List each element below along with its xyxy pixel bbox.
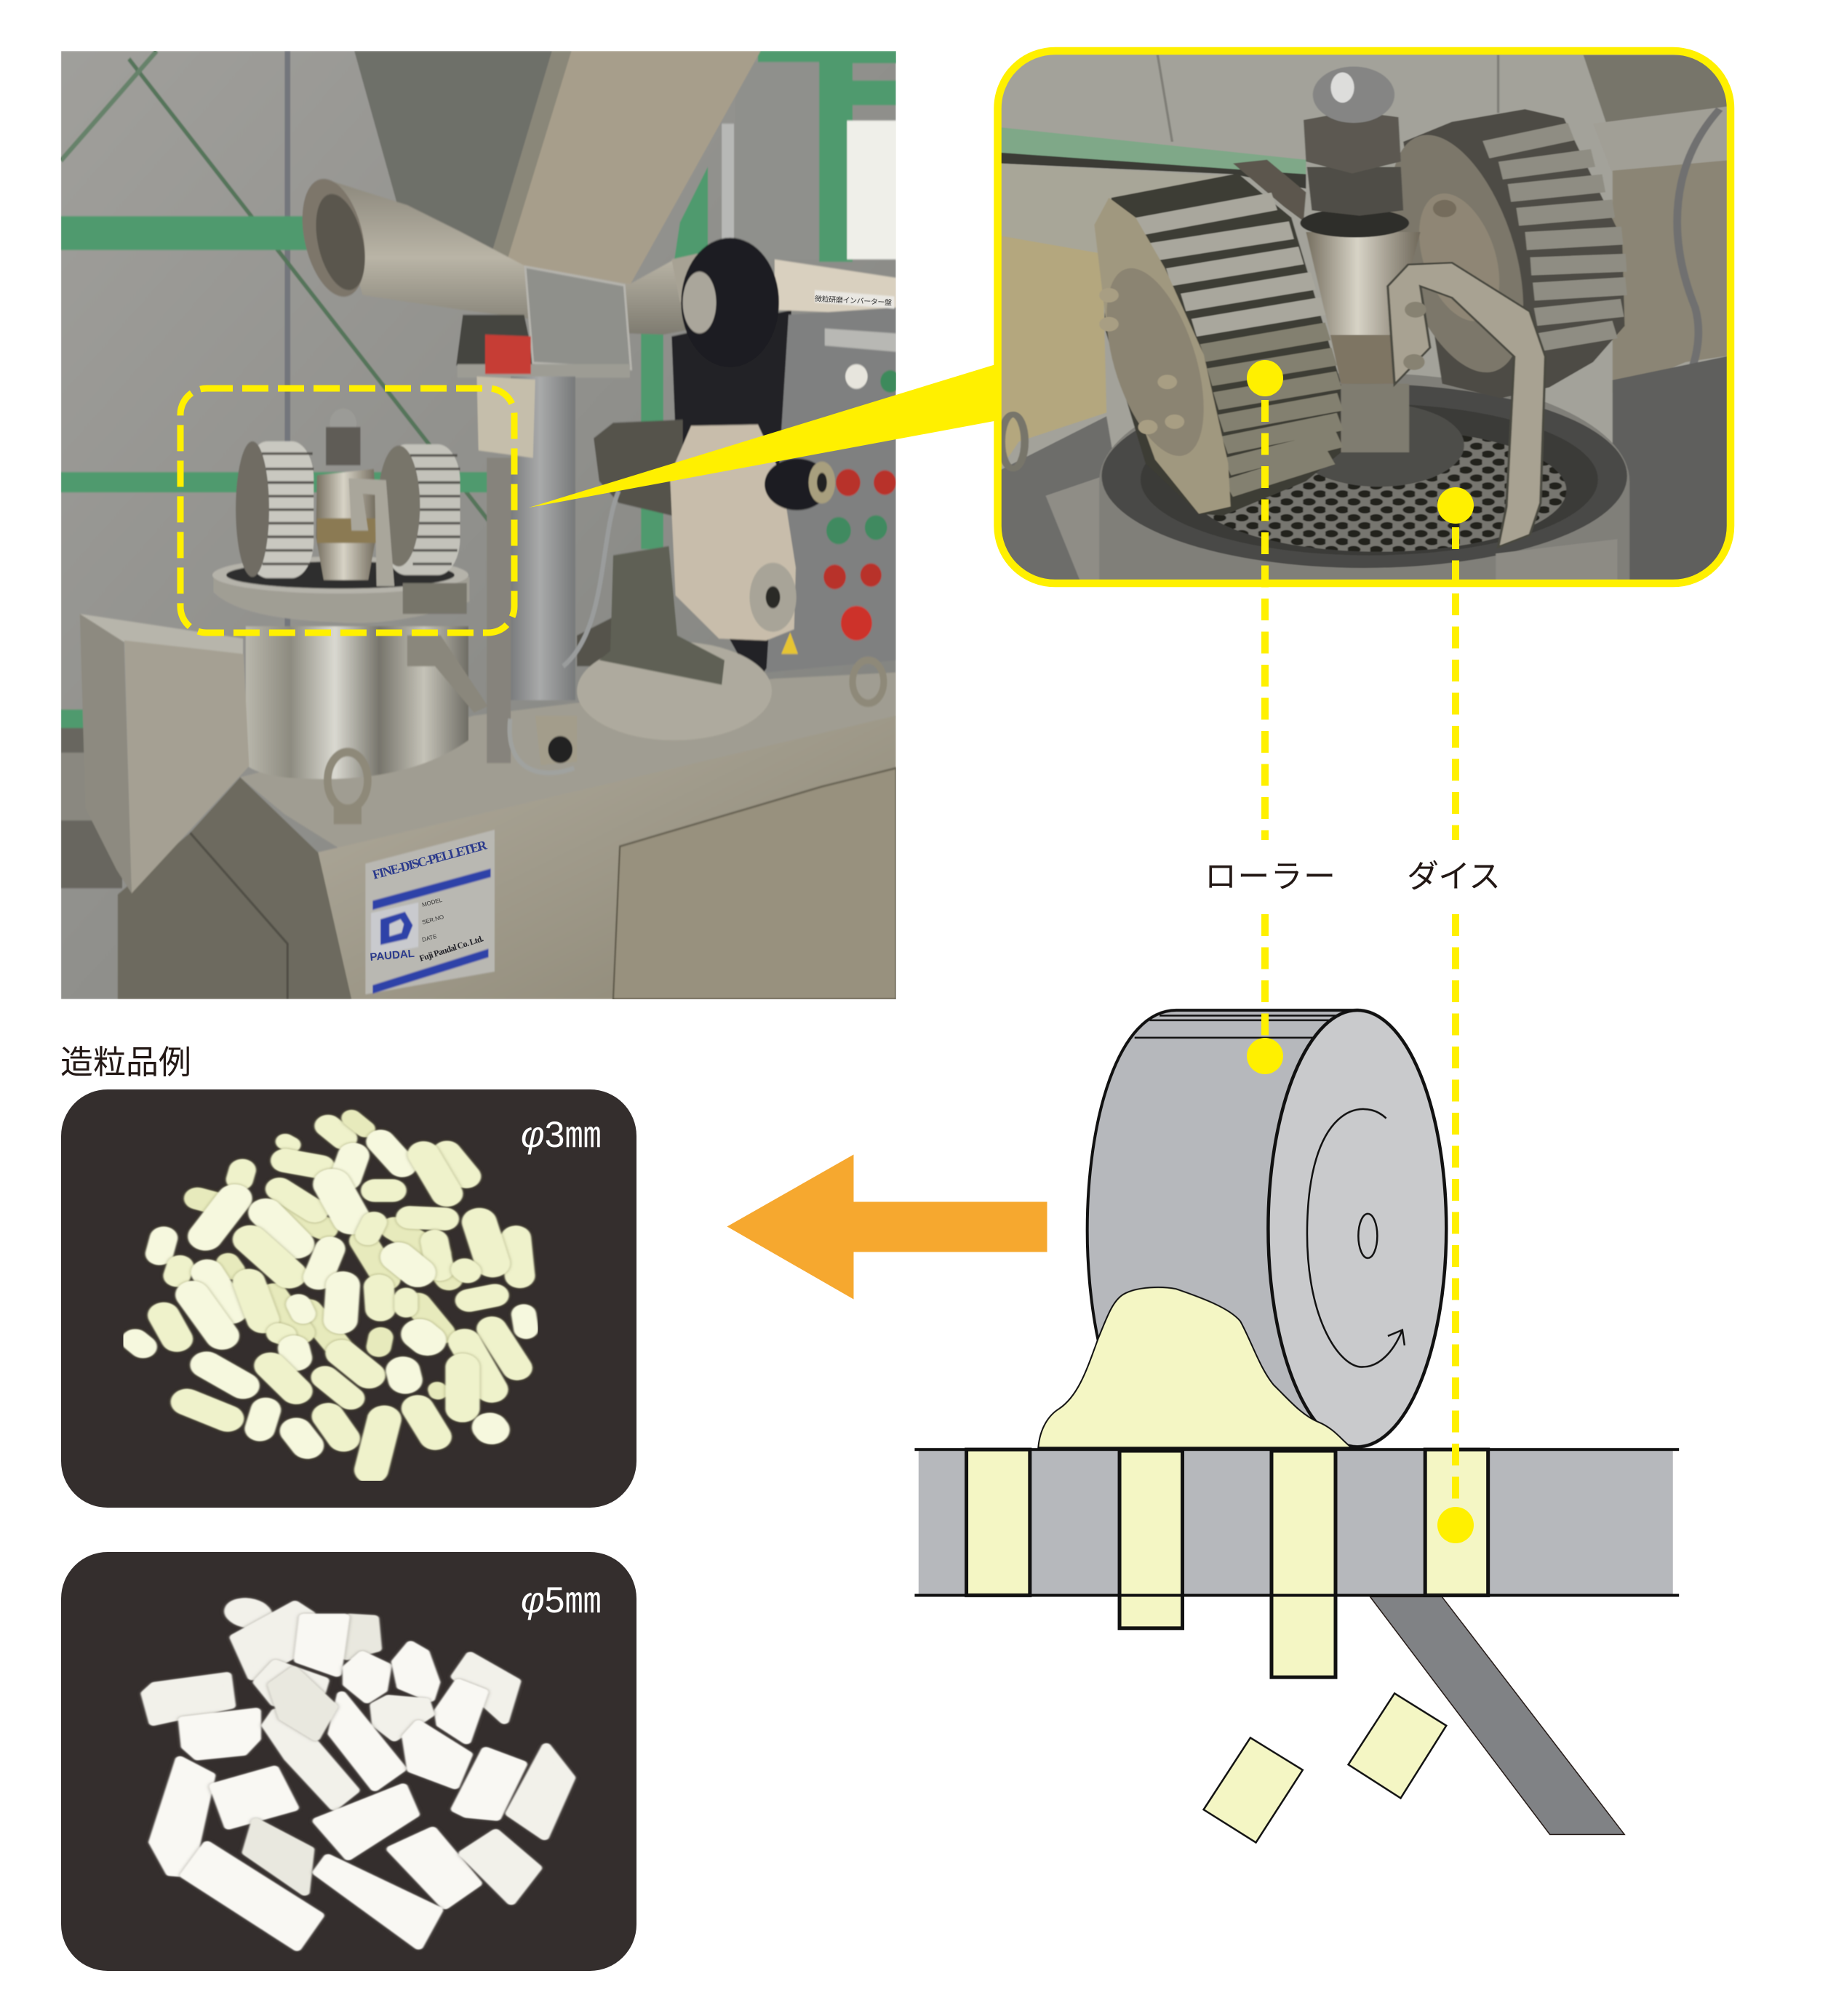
support block <box>456 315 535 367</box>
concrete wall background <box>61 51 896 999</box>
heading: granulated product examples: 造粒品例 <box>60 1044 191 1081</box>
name plate text: FINE-DISC-PELLETER <box>371 837 489 882</box>
thin rod <box>487 458 511 763</box>
discharge chute <box>1370 1596 1624 1834</box>
die hole 3 with extruding pellet <box>1272 1451 1336 1677</box>
knob <box>765 458 829 511</box>
handle <box>407 636 488 713</box>
window <box>847 121 897 260</box>
acorn cap <box>1313 67 1394 123</box>
control cabinet <box>671 310 791 673</box>
machine head base <box>1099 373 1629 590</box>
gear box <box>599 546 725 685</box>
round base plate <box>577 641 772 740</box>
die body <box>919 1449 1673 1596</box>
hopper <box>354 51 555 256</box>
machine top surface <box>240 673 896 852</box>
feed tube <box>335 183 686 335</box>
right wall strip <box>758 61 820 64</box>
green ledge <box>999 127 1306 175</box>
die hole 2 with extruding pellet <box>1119 1451 1183 1628</box>
leader line: die <box>1437 487 1474 1543</box>
pulley <box>749 563 797 632</box>
rollers <box>236 441 460 578</box>
limit switch <box>476 377 535 458</box>
name plate text: SER.NO <box>421 913 444 926</box>
zoomed photo: rollers and die <box>997 48 1734 590</box>
hex nuts <box>1307 167 1403 216</box>
wall joints and diagonal brace <box>61 51 496 660</box>
name plate text: PAUDAL <box>370 948 415 964</box>
right motor <box>1584 55 1734 127</box>
name plate <box>365 830 495 994</box>
belt cover <box>670 425 796 641</box>
dark machinery behind gear box <box>577 617 613 666</box>
name plate text <box>370 837 489 964</box>
name plate text: DATE <box>421 933 438 943</box>
panel background <box>61 1089 636 1508</box>
marker on diagram <box>1437 1507 1474 1543</box>
size label: φ3㎜ <box>521 1114 601 1155</box>
green steel frame <box>61 51 897 729</box>
rotation arrow <box>1307 1109 1405 1367</box>
label: roller: ローラー <box>1205 859 1336 895</box>
motor <box>594 420 683 519</box>
floor <box>999 236 1106 471</box>
drum <box>246 626 468 779</box>
marker on photo <box>1437 487 1474 524</box>
die plate with holes <box>1192 429 1566 552</box>
front ledge <box>1496 539 1617 586</box>
gearbox <box>1613 160 1734 393</box>
panel: 5 mm pellets <box>61 1552 636 1971</box>
die hole 4 <box>1425 1449 1488 1596</box>
die ring <box>213 577 470 623</box>
cable box <box>535 716 577 765</box>
bracket arm <box>1233 160 1306 221</box>
diagram: roller on die cross-section <box>914 1010 1679 1842</box>
washer <box>1300 209 1409 237</box>
left roller <box>1088 174 1341 516</box>
door <box>613 768 896 999</box>
arrow: output direction <box>727 1155 1047 1299</box>
roller grooves <box>1135 1015 1344 1038</box>
photo: pellet mill machine <box>61 51 901 999</box>
grey floor <box>1613 355 1734 586</box>
panel background <box>61 1552 636 1971</box>
plate <box>525 267 631 369</box>
roller face <box>1268 1010 1446 1447</box>
machine side <box>118 777 351 999</box>
frame around zoomed photo <box>998 51 1731 583</box>
zoom callout wedge <box>529 364 998 508</box>
roller axle <box>1358 1214 1377 1258</box>
large pole <box>511 377 575 700</box>
black disc <box>681 237 780 335</box>
name plate text: MODEL <box>421 897 444 908</box>
control panel sign: 微粒研磨インバーター盤 <box>815 294 892 308</box>
panel: 3 mm pellets <box>61 1089 636 1508</box>
marker on photo <box>1247 360 1283 396</box>
eye bolts <box>327 752 367 809</box>
label: die: ダイス <box>1407 859 1501 895</box>
name plate text: Fuji Paudal Co. Ltd. <box>418 933 484 964</box>
machine front <box>317 716 896 999</box>
eye bolt <box>1002 415 1025 468</box>
right bracket <box>1388 263 1545 547</box>
pellets <box>145 1598 570 1947</box>
wall <box>997 48 1732 586</box>
floor <box>61 728 122 888</box>
center shaft <box>1306 232 1421 335</box>
falling pellets <box>1204 1737 1303 1842</box>
marker on diagram <box>1247 1038 1283 1074</box>
pellets <box>135 1118 526 1470</box>
switch buttons <box>781 364 901 654</box>
roller body <box>1087 1010 1357 1447</box>
right roller <box>1366 109 1627 398</box>
chute <box>80 614 132 893</box>
center hub ring <box>1294 404 1464 487</box>
die hole 1 <box>967 1449 1030 1596</box>
lower shaft <box>1341 384 1409 452</box>
leader line: roller <box>1247 360 1283 1074</box>
die surfaces <box>914 1449 1679 1596</box>
size label: φ5㎜ <box>521 1580 601 1620</box>
dashed selection box <box>180 388 514 633</box>
red safety block <box>485 335 531 374</box>
center hub <box>316 409 394 586</box>
powder feed <box>1038 1287 1352 1447</box>
